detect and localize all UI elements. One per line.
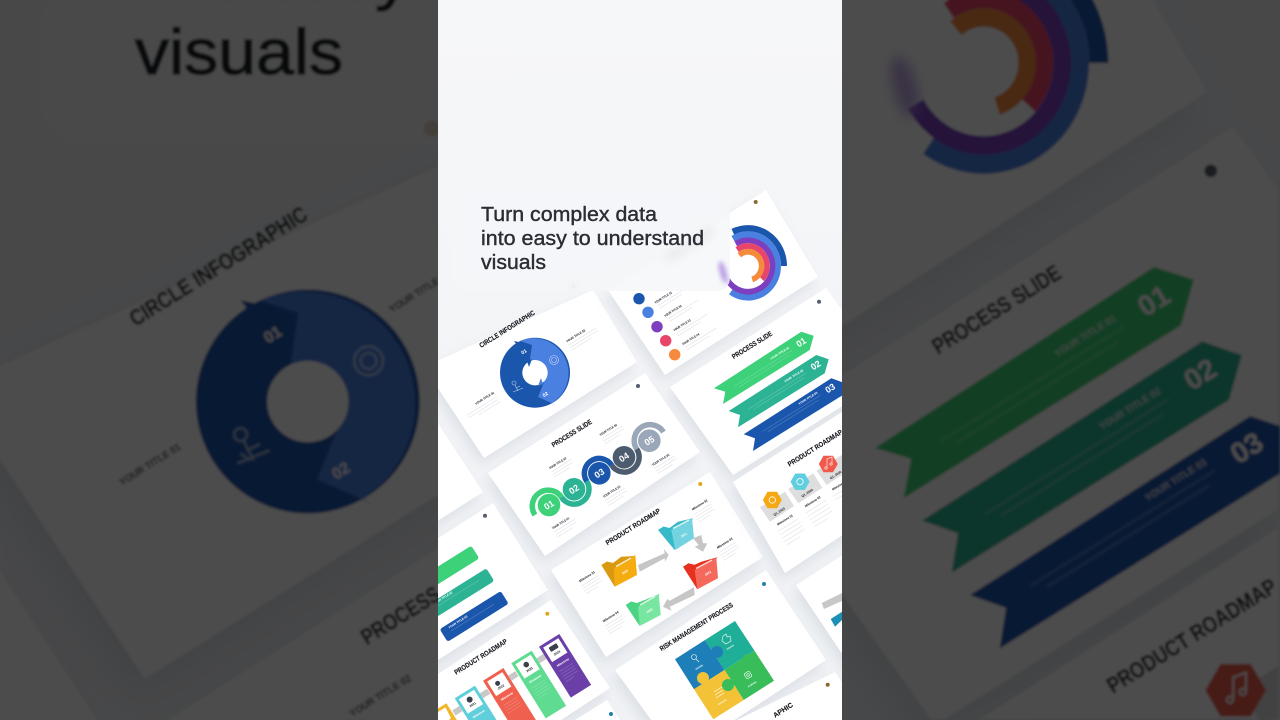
slide: product roadmap hexagons: Q1, 2020 xyxy=(773,506,786,517)
slide: lower right partial xyxy=(796,556,842,668)
slide: product roadmap folders: Milestone 04 xyxy=(602,610,620,623)
slide: product roadmap hexagons: Milestone 02 xyxy=(804,495,822,508)
slide: product roadmap folders: PRODUCT ROADMAP xyxy=(605,508,662,547)
centre column xyxy=(438,0,842,720)
slide: product roadmap hexagons: Q1, 2020 xyxy=(829,470,843,480)
slide: left process bars: YOUR TITLE 03 xyxy=(448,614,469,630)
slide: risk management puzzle: Evaluate xyxy=(747,680,758,688)
slide: process arrows: PROCESS SLIDE xyxy=(731,330,774,361)
slide: bottom partial graphic xyxy=(737,672,850,720)
slide: process wave: 02 xyxy=(567,482,581,496)
slide: product roadmap hexagons: PRODUCT ROADMAP xyxy=(787,429,844,468)
slide: product roadmap folders: 2022 xyxy=(704,570,712,577)
slide: product roadmap hexagons xyxy=(732,412,842,578)
slide: risk management puzzle xyxy=(615,570,826,720)
slide: circle infographic: YOUR TITLE 01 xyxy=(474,391,495,406)
callout: headline card xyxy=(452,185,730,291)
slide: risk management puzzle: Identify xyxy=(695,664,704,671)
slide: process wave: YOUR TITLE 05 xyxy=(651,453,670,467)
slide: process arrows: 02 xyxy=(809,358,823,372)
left blurred panel: 02 xyxy=(329,459,353,483)
left blurred panel: CIRCLE INFOGRAPHIC xyxy=(125,201,312,331)
left blurred panel: YOUR TITLE 01 xyxy=(118,442,183,489)
slide: left process bars: YOUR TITLE 02 xyxy=(433,590,454,606)
right blurred panel: YOUR TITLE 03 xyxy=(1143,457,1209,504)
slide: product roadmap cards: 2021 xyxy=(469,701,477,708)
right blurred panel: YOUR TITLE 01 xyxy=(1053,313,1119,360)
slide: product roadmap cards: Milestone xyxy=(472,708,486,719)
slide: process wave: PROCESS SLIDE xyxy=(551,419,594,449)
slide: product roadmap cards: 2022 xyxy=(497,683,505,691)
slide: bottom partial graphic: APHIC xyxy=(772,702,795,720)
slide: circle infographic xyxy=(424,284,637,458)
right blurred panel xyxy=(842,0,1280,720)
slide: circular chart: YOUR TITLE 01 xyxy=(654,291,673,305)
slide: risk management puzzle: Controls xyxy=(717,698,728,706)
slide: process wave xyxy=(488,373,700,556)
slide: product roadmap folders: 2023 xyxy=(646,607,654,614)
slide: process wave: YOUR TITLE 04 xyxy=(599,423,618,437)
slide: product roadmap hexagons: Milestone 03 xyxy=(831,478,849,491)
right blurred panel: PROCESS SLIDE xyxy=(927,260,1066,359)
slide: circle infographic: YOUR TITLE 02 xyxy=(565,328,586,344)
slide: process wave: YOUR TITLE 02 xyxy=(548,456,567,470)
right blurred panel: 03 xyxy=(1225,427,1269,471)
slide: product roadmap folders: 2020 xyxy=(621,568,629,575)
slide: circle infographic: 01 xyxy=(520,348,529,356)
slide: product roadmap cards xyxy=(438,600,610,720)
slide: process wave: 05 xyxy=(642,434,656,448)
slide: process arrows: YOUR TITLE 03 xyxy=(798,391,819,406)
left blurred panel: 01 xyxy=(261,323,285,347)
slide: circle infographic: CIRCLE INFOGRAPHIC xyxy=(478,310,536,350)
slide: process arrows: YOUR TITLE 02 xyxy=(783,368,804,384)
slide: circular chart: YOUR TITLE 04 xyxy=(681,332,700,346)
slide: product roadmap cards: 2024 xyxy=(553,649,561,657)
slide: process wave: YOUR TITLE 03 xyxy=(602,485,621,499)
slide: process wave: 04 xyxy=(617,450,631,464)
slide: left partial top xyxy=(438,424,483,528)
slide: circular chart: YOUR TITLE 03 xyxy=(672,318,692,332)
slide: product roadmap folders xyxy=(551,472,763,657)
callout: headline card: visuals xyxy=(481,252,546,274)
slide: bottom small partial xyxy=(575,700,620,720)
slide: process arrows: YOUR TITLE 01 xyxy=(769,346,790,361)
left blurred panel: visuals xyxy=(135,16,343,88)
left blurred panel: YOUR TITLE 02 xyxy=(348,673,414,720)
slide: circular chart: CIRCLE CHART xyxy=(665,228,717,264)
slide: product roadmap cards: Milestone xyxy=(528,673,542,684)
slide: product roadmap cards: Milestone xyxy=(556,657,570,668)
callout: headline card: into easy to understand xyxy=(481,228,704,250)
slide: product roadmap hexagons: Milestone 01 xyxy=(776,513,794,526)
right blurred panel: 02 xyxy=(1179,353,1223,397)
slide: risk management puzzle: Assess xyxy=(726,644,735,651)
slide: circular chart: YOUR TITLE 02 xyxy=(663,304,683,318)
slide: risk management puzzle: RISK MANAGEMENT PROCESS xyxy=(659,602,735,653)
slide: product roadmap hexagons: Q1, 2020 xyxy=(801,488,814,498)
slide: process wave: 03 xyxy=(592,466,606,480)
left blurred panel: PROCESS SLIDE xyxy=(356,550,494,650)
slide: process arrows: 01 xyxy=(794,335,808,349)
slide: process arrows: 03 xyxy=(823,381,837,395)
slide: product roadmap folders: Milestone 01 xyxy=(578,570,596,583)
slide: process wave: 01 xyxy=(542,498,556,512)
slide: product roadmap cards: 2023 xyxy=(525,666,534,673)
left blurred panel xyxy=(0,0,438,716)
slide: process wave: YOUR TITLE 01 xyxy=(551,516,570,530)
left blurred panel: YOUR TITLE 02 xyxy=(387,269,453,316)
callout: headline card: Turn complex data xyxy=(481,204,658,226)
right blurred panel: YOUR TITLE 02 xyxy=(1097,386,1163,433)
slide: product roadmap folders: 2021 xyxy=(680,531,688,538)
slide: product roadmap folders: Milestone 03 xyxy=(716,537,734,550)
slide: product roadmap cards: Milestone xyxy=(500,691,514,702)
slide: circular chart xyxy=(608,190,818,375)
slide: circle infographic: 02 xyxy=(542,391,550,399)
slide: product roadmap cards: PRODUCT ROADMAP xyxy=(453,638,509,677)
slide: left process bars xyxy=(438,503,548,667)
slide: product roadmap folders: Milestone 02 xyxy=(691,498,709,511)
slide: process arrows xyxy=(670,288,842,480)
right blurred panel: 01 xyxy=(1132,279,1176,323)
